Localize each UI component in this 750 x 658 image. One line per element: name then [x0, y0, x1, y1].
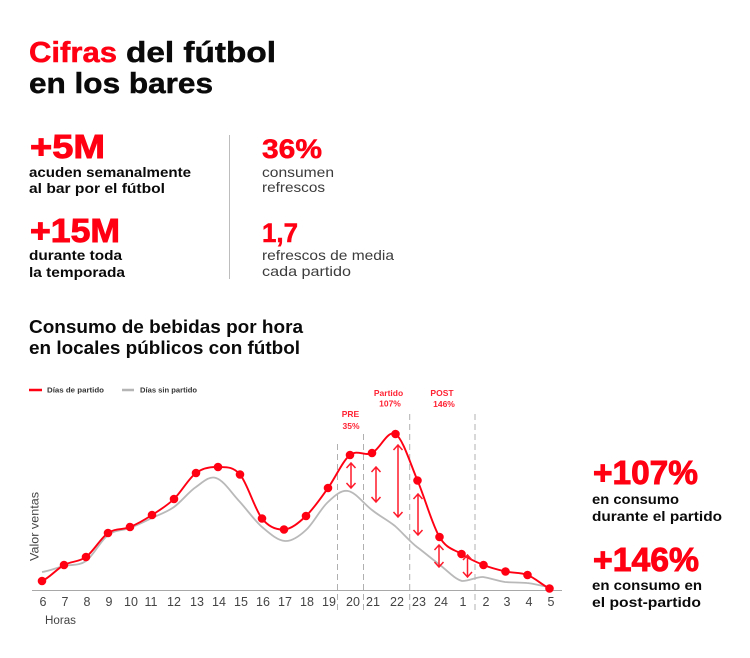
callout: +146%: en consumo en — [592, 577, 702, 593]
hour labels: 10 — [124, 595, 138, 609]
stat: 36% soft drinks — [262, 134, 334, 195]
title: en los bares — [29, 68, 213, 100]
callout: +107% — [592, 454, 722, 524]
legend: Días sin partido — [140, 388, 197, 394]
hour labels: 17 — [278, 595, 292, 609]
hour labels: 4 — [526, 595, 533, 609]
stat: +5M weekly: al bar por el fútbol — [29, 180, 165, 196]
hour labels: 6 — [40, 595, 47, 609]
stat: 36% soft drinks: consumen — [262, 164, 334, 180]
hour labels: 8 — [84, 595, 91, 609]
stat: 1,7 soft drinks per match: cada partido — [262, 263, 351, 279]
hour labels: 9 — [106, 595, 113, 609]
x axis line — [32, 590, 562, 592]
callout: +107%: +107% — [593, 454, 698, 491]
chart heading — [29, 317, 304, 358]
stat: +15M season: +15M — [30, 212, 120, 249]
annotation: Partido 107%: 107% — [379, 398, 401, 408]
hour labels: 21 — [366, 595, 380, 609]
annotation: POST 146%: POST — [430, 388, 454, 398]
callout: +146%: +146% — [593, 541, 699, 578]
callout: +146% — [592, 541, 702, 610]
hour labels: 2 — [483, 595, 490, 609]
stat: +15M season — [29, 212, 125, 280]
hour labels: 23 — [412, 595, 426, 609]
callout: +107%: en consumo — [592, 491, 679, 507]
y axis label: Valor ventas — [30, 492, 42, 561]
difference arrows — [346, 445, 472, 577]
chart heading: Consumo de bebidas por hora — [29, 317, 304, 337]
stat: +15M season: la temporada — [29, 264, 125, 280]
line chart — [30, 388, 562, 627]
stat: 36% soft drinks: refrescos — [262, 179, 325, 195]
stat: +5M weekly: acuden semanalmente — [29, 164, 191, 180]
callout: +107%: durante el partido — [592, 508, 722, 524]
annotation: PRE 35%: PRE — [342, 409, 360, 419]
data points — [38, 430, 554, 593]
chart heading: en locales públicos con fútbol — [29, 338, 300, 358]
hour labels: 5 — [548, 595, 555, 609]
stat: +5M weekly — [29, 128, 191, 196]
stat: +5M weekly: +5M — [30, 128, 105, 165]
legend — [29, 388, 197, 394]
hour labels: 16 — [256, 595, 270, 609]
stat: 1,7 soft drinks per match: 1,7 — [262, 218, 298, 248]
hour labels: 14 — [212, 595, 226, 609]
annotation: PRE 35%: 35% — [342, 421, 360, 431]
grey line: non-match days — [42, 477, 550, 587]
hour labels: 11 — [145, 595, 158, 609]
hour labels: 13 — [190, 595, 204, 609]
hour labels: 22 — [390, 595, 404, 609]
title: Cifras — [29, 37, 117, 69]
callout: +146%: el post-partido — [592, 594, 701, 610]
stat: 1,7 soft drinks per match: refrescos de media — [262, 247, 394, 263]
hour labels — [40, 595, 555, 609]
stat: +15M season: durante toda — [29, 247, 122, 263]
hour labels: 24 — [434, 595, 448, 609]
stat: 1,7 soft drinks per match — [262, 218, 394, 279]
hour labels: 18 — [300, 595, 314, 609]
title — [29, 37, 276, 100]
annotation: POST 146% — [430, 388, 455, 409]
annotation: Partido 107%: Partido — [374, 388, 403, 398]
hour labels: 7 — [62, 595, 69, 609]
hour labels: 12 — [167, 595, 181, 609]
legend: Días de partido — [47, 388, 104, 394]
hour labels: 3 — [504, 595, 511, 609]
hour labels: 1 — [460, 595, 467, 609]
stat: 36% soft drinks: 36% — [262, 134, 322, 164]
annotation: POST 146%: 146% — [433, 399, 455, 409]
hour labels: 20 — [346, 595, 360, 609]
annotation: PRE 35% — [342, 409, 360, 431]
title: del fútbol — [126, 37, 276, 69]
hour labels: 15 — [234, 595, 248, 609]
annotation: Partido 107% — [374, 388, 403, 408]
x axis title: Horas — [45, 615, 76, 627]
hour labels: 19 — [322, 595, 336, 609]
red line: match days — [42, 433, 550, 588]
